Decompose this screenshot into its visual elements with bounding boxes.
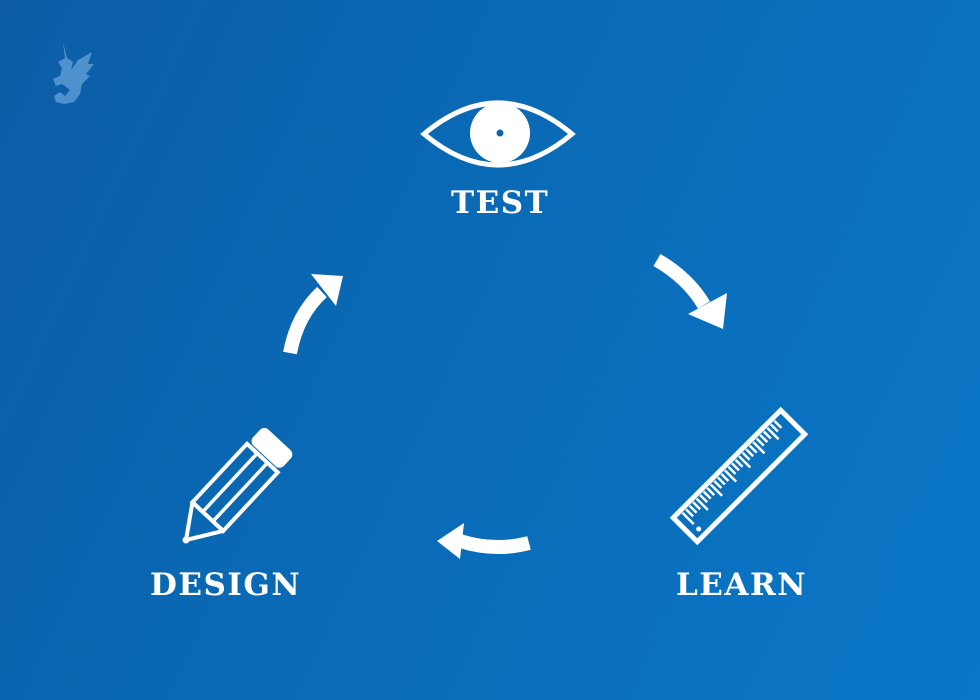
heading: TEST: TEST <box>451 185 549 221</box>
heading: DESIGN: DESIGN <box>150 567 301 603</box>
icon: pencil <box>182 428 292 544</box>
arrow: learn to design <box>437 523 531 559</box>
arrow: test to learn <box>654 254 727 329</box>
heading: LEARN: LEARN <box>676 567 807 603</box>
icon: eye <box>420 100 576 168</box>
arrow: design to test <box>283 274 343 354</box>
icon: ruler <box>670 406 808 546</box>
logo: griffin <box>53 42 94 104</box>
